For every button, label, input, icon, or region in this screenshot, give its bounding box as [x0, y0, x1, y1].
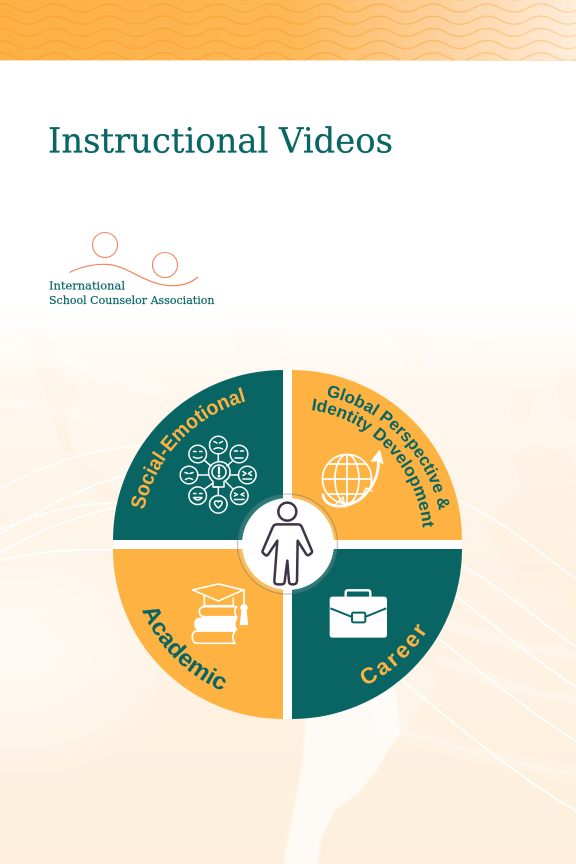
quadrant: academic	[113, 549, 283, 719]
logo: International School Counselor Association: International	[49, 278, 125, 292]
background world map	[0, 305, 576, 864]
label: Academic: Academic	[142, 609, 226, 690]
quadrant: career	[292, 549, 462, 719]
header wave band	[0, 0, 576, 61]
icon: emotions around a head	[180, 436, 256, 513]
quadrant: social-emotional	[113, 370, 283, 540]
label: Career: Career	[360, 624, 426, 684]
center circle with person	[238, 494, 338, 594]
label: Social-Emotional: Social-Emotional	[131, 387, 246, 508]
icon: books and graduation cap	[192, 584, 247, 643]
quadrant wheel	[113, 370, 462, 719]
title: Instructional Videos	[48, 122, 393, 162]
icon: person outline	[262, 503, 312, 584]
gap cross	[113, 370, 462, 719]
label: Identity Development: Identity Development	[312, 398, 434, 528]
quadrant: global perspective	[292, 370, 462, 540]
icon: globe with arrow	[322, 451, 382, 507]
logo: International School Counselor Association: School Counselor Association	[49, 293, 215, 307]
logo: International School Counselor Association	[49, 232, 215, 307]
icon: briefcase	[330, 590, 387, 638]
label: Global Perspective &: Global Perspective &	[328, 386, 450, 510]
